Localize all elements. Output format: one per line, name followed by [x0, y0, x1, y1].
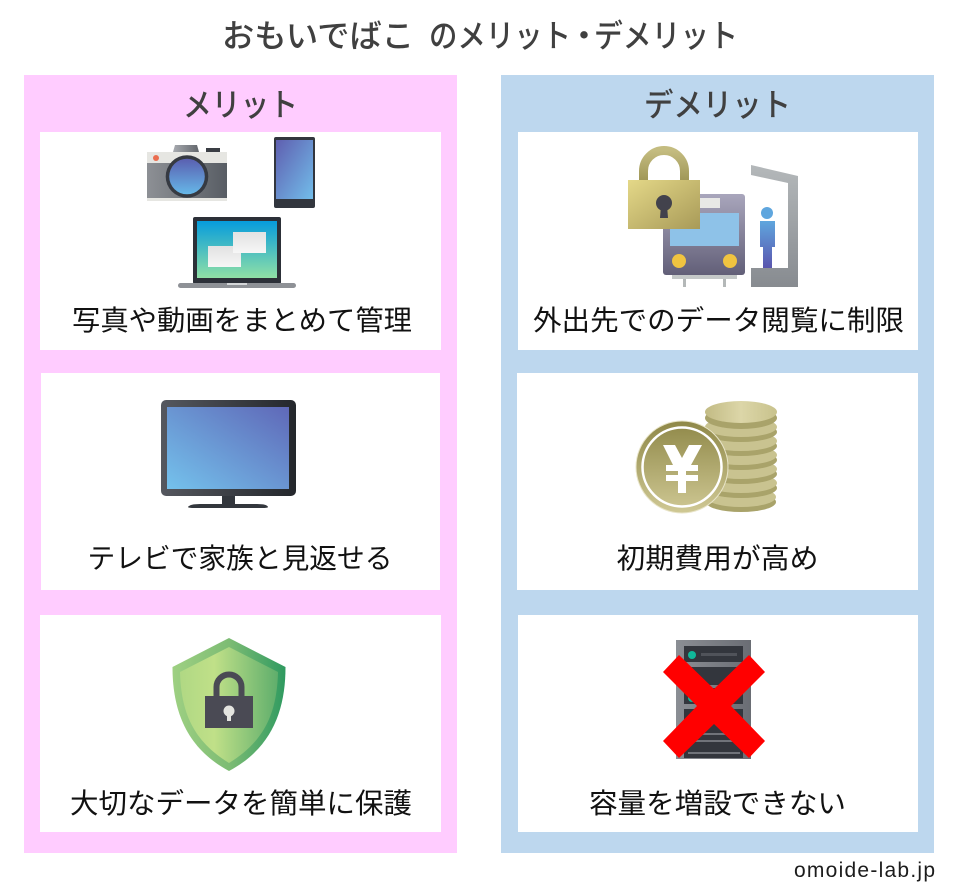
icon: yen coins [636, 401, 777, 514]
panel: demerits [501, 75, 934, 853]
heading: demerits: デメリット [644, 87, 791, 123]
label: テレビで家族と見返せる [88, 543, 392, 574]
icon: bus stop [751, 165, 798, 287]
icon: camera [147, 145, 227, 201]
icon: laptop [178, 217, 296, 288]
card: limited data viewing away from home [518, 132, 918, 350]
icon: smartphone [274, 137, 315, 208]
source credit: omoide-lab.jp [794, 859, 935, 882]
label: 外出先でのデータ閲覧に制限 [533, 305, 904, 336]
card: high initial cost [517, 373, 918, 590]
label: 写真や動画をまとめて管理 [72, 305, 412, 336]
icon: TV [161, 400, 296, 508]
title: のメリット [429, 18, 571, 54]
title: おもいでばこ [222, 18, 414, 54]
card: watch on TV with family [41, 373, 440, 590]
card: protect data easily [40, 615, 441, 832]
title: デメリット [594, 18, 738, 54]
panel: merits [24, 75, 457, 853]
icon: shield with padlock [172, 638, 286, 771]
card: cannot expand capacity [518, 615, 918, 832]
label: 大切なデータを簡単に保護 [70, 788, 412, 819]
title: ・ [568, 18, 600, 54]
icon: server crossed out [663, 640, 765, 759]
label: 初期費用が高め [616, 543, 818, 574]
icon: red cross [663, 655, 765, 758]
heading: merits: メリット [183, 87, 298, 123]
title [222, 18, 738, 54]
label: 容量を増設できない [589, 788, 846, 819]
icon: padlock [628, 150, 700, 229]
icon: bus [663, 194, 745, 287]
card: manage photos and videos [40, 132, 441, 350]
